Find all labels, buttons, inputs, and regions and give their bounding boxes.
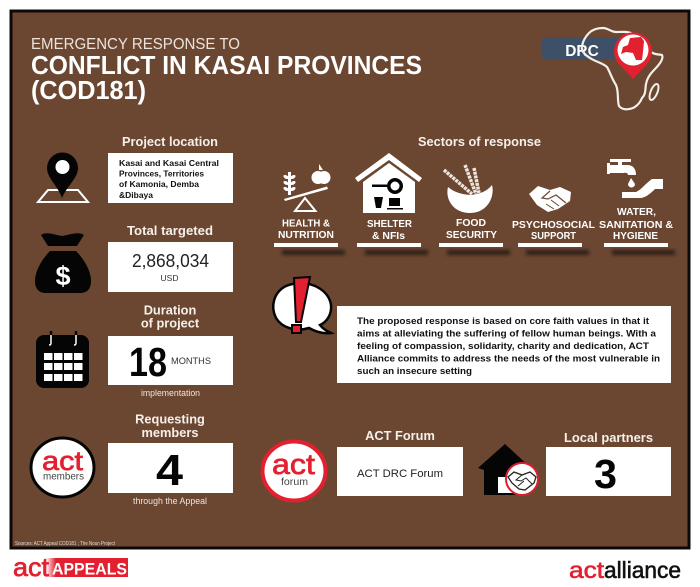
sector: water, sanitation and hygiene: WATER, [617,206,656,218]
text box: Kasai and Kasai Central [119,158,219,168]
logo: act alliance: alliance [604,557,681,583]
statement box: The proposed response is based on core faith values in that it [357,316,650,327]
icon: act forum [262,442,326,500]
sector: shelter and NFIs [355,153,428,255]
icon: money bag: $ [55,261,71,291]
heading: Requesting [135,412,205,426]
block: duration of project [36,302,233,398]
icon: speech bubble with exclamation mark [273,277,331,333]
sector: food security: FOOD [456,217,486,229]
sector: health and nutrition: HEALTH & [282,218,330,230]
icon: handshake [529,186,571,212]
heading [135,412,205,440]
value box: 4 [156,446,184,495]
sector: psychosocial support: SUPPORT [531,230,577,242]
sector: water, sanitation and hygiene: HYGIENE [613,230,658,242]
block: requesting members [31,412,233,506]
icon: money bag [35,233,91,293]
sector: health and nutrition [274,164,345,255]
icon: calendar [36,331,89,388]
statement box: aims at alleviating the suffering of fellow human beings. With a [357,328,657,340]
heading [141,302,200,330]
sector: food security: SECURITY [446,229,497,241]
text box [337,447,463,496]
icon: tap and hand [607,159,663,198]
text box: of Kamonia, Demba [119,179,199,189]
icon: house with kitchen items [355,153,422,213]
label: DRC: DRC [565,43,599,60]
block: local partners [478,430,671,497]
icon: house with handshake [478,444,538,495]
sector: shelter and NFIs: & NFIs [372,230,405,242]
icon: act members [31,438,94,497]
text box: &Dibaya [119,190,153,200]
logo: act alliance: act [569,557,605,583]
sources note: Sources: ACT Appeal COD181 ; The Noun Project [15,541,115,547]
heading: ACT Forum [365,428,435,443]
outline: Africa [582,28,662,109]
note: through the Appeal [133,496,207,506]
sector: psychosocial support [512,186,596,255]
value box: 18 [129,339,167,385]
icon: act forum: forum [281,476,308,488]
sector: psychosocial support: PSYCHOSOCIAL [512,219,596,231]
value box: MONTHS [171,356,211,366]
value box [108,443,233,495]
sector: shelter and NFIs: SHELTER [367,218,412,230]
logo: act appeals: APPEALS [52,560,127,578]
heading: Local partners [564,430,653,445]
value box [108,336,233,385]
sector: water, sanitation and hygiene [599,159,675,255]
icon: act members: act [42,446,84,476]
map: Africa outline with DRC pin [541,28,662,109]
island: Madagascar [648,83,660,101]
value box: USD [161,273,178,283]
statement box: such an insecure setting [357,366,472,377]
block: total targeted [35,223,233,293]
heading: Project location [122,134,218,149]
title [31,36,422,105]
heading: of project [141,316,200,330]
block: project location [38,134,233,203]
text box [108,153,233,203]
heading: Sectors of response [418,134,541,149]
heading: members [142,425,198,440]
value box: 3 [594,451,617,497]
value box [108,242,233,292]
sector: health and nutrition: NUTRITION [278,229,334,241]
text box: ACT DRC Forum [357,468,443,480]
sector: food security [439,165,510,255]
block: sectors of response [274,134,675,255]
value box [546,447,671,497]
note: implementation [141,388,200,398]
statement box [337,306,671,383]
icon: act forum: act [272,449,315,481]
pin [614,32,652,79]
heading: Total targeted [127,223,213,238]
icon: bowl with wheat [444,165,493,213]
statement box: Alliance commits to address the needs of the most vulnerable in [357,354,660,364]
icon: scales with wheat and apple [283,164,330,211]
icon: act members: members [43,472,84,482]
logo: act alliance [569,557,681,583]
title: (COD181) [31,75,146,105]
statement box: feeling of compassion, solidarity, charity and dedication, ACT [357,341,649,352]
text box: Provinces, Territories [119,168,204,178]
title: CONFLICT IN KASAI PROVINCES [31,50,422,80]
block: ACT forum [262,428,463,500]
heading: Duration [144,302,196,318]
logo: act appeals: act [13,552,50,582]
logo: act appeals [13,552,128,582]
sector: water, sanitation and hygiene: SANITATION & [599,219,673,231]
value box: 2,868,034 [132,250,209,271]
title: EMERGENCY RESPONSE TO [31,36,240,53]
icon: map pin [38,152,88,202]
